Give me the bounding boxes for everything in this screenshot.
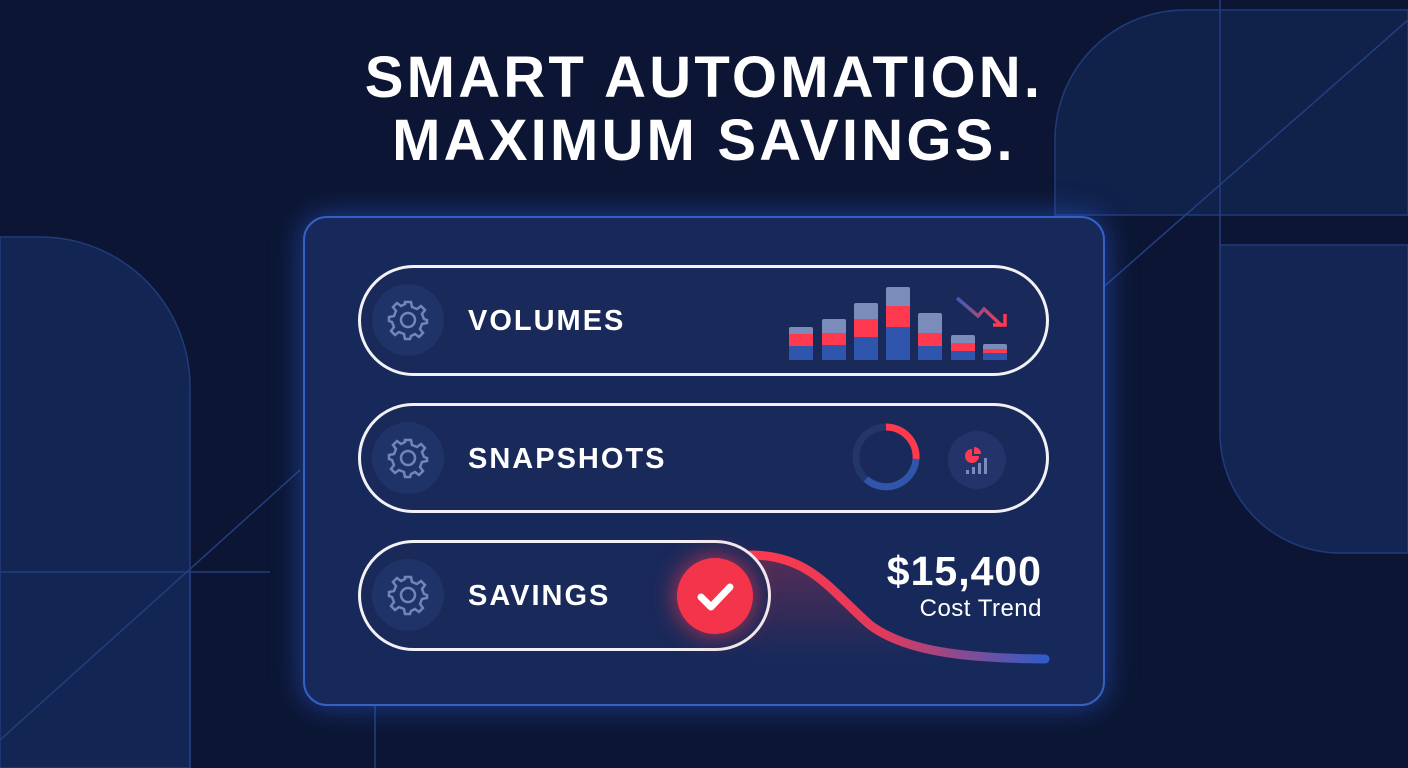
title: MAXIMUM SAVINGS. [392, 108, 1016, 173]
callout: savings amount: Cost Trend [920, 595, 1042, 622]
chart: cost trend curve [748, 550, 1050, 664]
callout: savings amount: $15,400 [887, 548, 1042, 594]
callout: savings amount [887, 548, 1042, 622]
icon: check badge [677, 558, 753, 634]
panel: main card [303, 216, 1105, 706]
icon: gear [372, 284, 444, 356]
icon: gear [372, 422, 444, 494]
row: savings [358, 540, 771, 651]
bar chart [789, 287, 1007, 360]
icon: stats circle [948, 431, 1006, 489]
title: SMART AUTOMATION. [365, 45, 1043, 110]
icon: gear [372, 559, 444, 631]
donut chart [852, 424, 920, 490]
row: volumes [358, 265, 1049, 376]
label: snapshots: SNAPSHOTS [468, 443, 666, 475]
label: savings: SAVINGS [468, 580, 610, 612]
row: snapshots [358, 403, 1049, 513]
title [365, 45, 1043, 173]
label: volumes: VOLUMES [468, 305, 625, 337]
